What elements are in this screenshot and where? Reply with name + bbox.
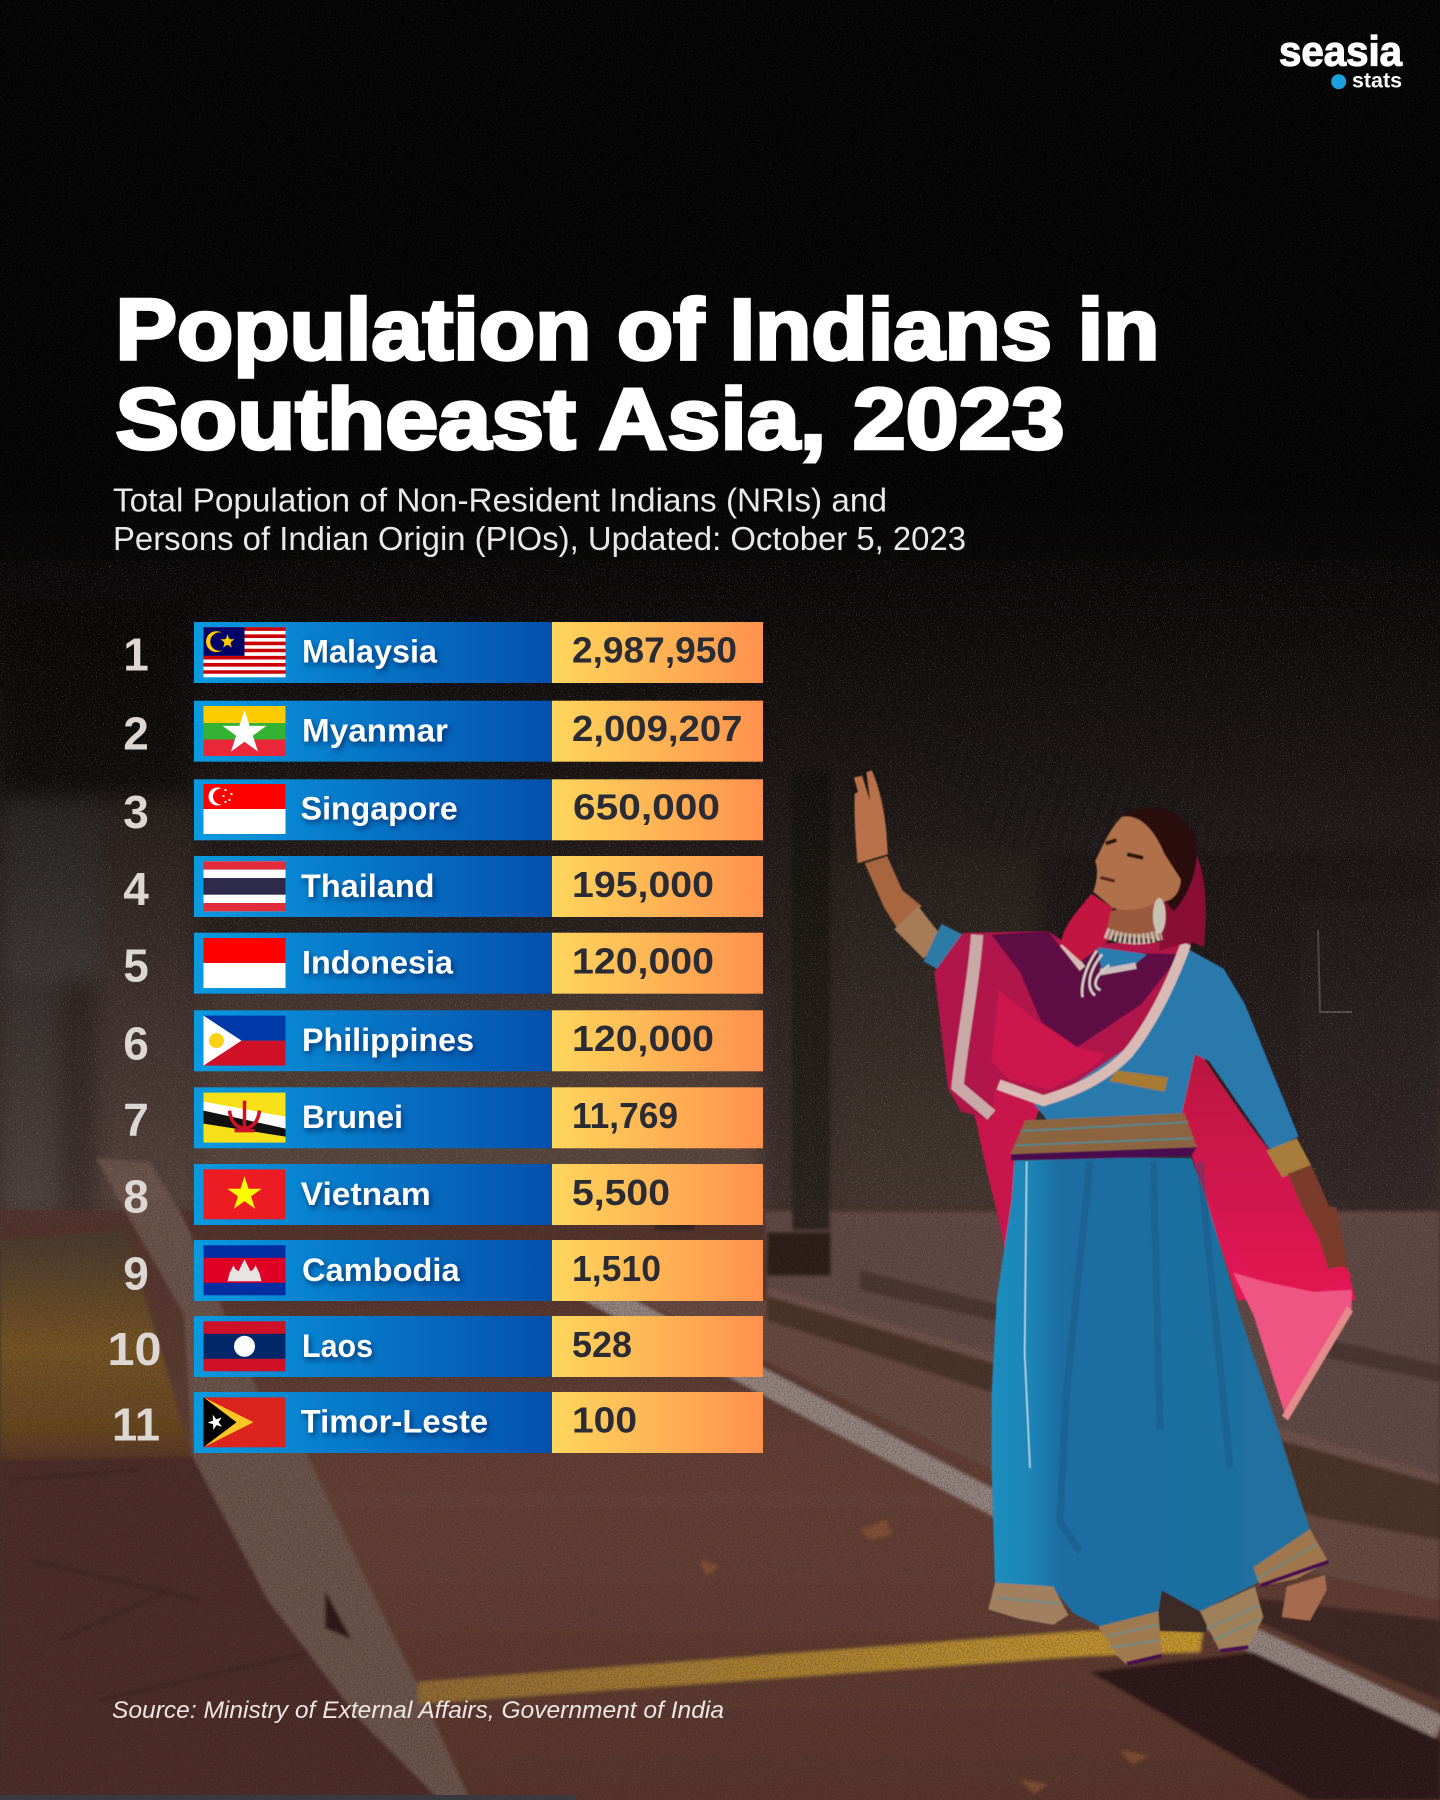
row 3: Singapore xyxy=(123,779,763,840)
row 5: Indonesia: 120,000 xyxy=(572,941,714,982)
row 9: Cambodia: 9 xyxy=(123,1247,149,1299)
row 7: Brunei: Brunei xyxy=(302,1099,403,1135)
row 4: Thailand xyxy=(123,856,763,917)
leaves xyxy=(700,1400,1150,1794)
row 8: Vietnam xyxy=(123,1164,763,1225)
row 8: Vietnam: 8 xyxy=(123,1171,149,1223)
row 1: Malaysia: 2,987,950 xyxy=(572,630,737,670)
row 5: Indonesia: 5 xyxy=(123,940,149,992)
subtitle: Persons of Indian Origin (PIOs), Updated: October 5, 2023 xyxy=(113,520,966,557)
row 7: Brunei xyxy=(123,1087,763,1148)
row 1: Malaysia: 1 xyxy=(123,629,149,681)
row 5: Indonesia xyxy=(123,933,763,994)
row 9: Cambodia xyxy=(123,1240,763,1301)
row 10: Laos: 10 xyxy=(108,1323,162,1375)
row 6: Philippines: 6 xyxy=(123,1017,149,1069)
flag: Indonesia xyxy=(204,938,286,988)
flag: Brunei xyxy=(204,1093,286,1143)
row 8: Vietnam: 5,500 xyxy=(572,1172,670,1213)
row 10: Laos: Laos xyxy=(302,1328,373,1364)
row 10: Laos xyxy=(108,1316,763,1377)
row 1: Malaysia: Malaysia xyxy=(302,634,437,670)
row 6: Philippines: 120,000 xyxy=(572,1018,714,1059)
row 9: Cambodia: Cambodia xyxy=(302,1252,460,1288)
upper body of dancer xyxy=(854,770,1347,1269)
row 3: Singapore: 650,000 xyxy=(573,786,720,827)
title: Southeast Asia, 2023 xyxy=(116,372,1064,468)
yellow road line xyxy=(418,1631,1203,1704)
subtitle xyxy=(113,482,966,557)
shadow xyxy=(1090,1652,1440,1800)
concrete strip xyxy=(96,1158,470,1800)
logo: seasia stats: seasia xyxy=(1279,28,1403,74)
roof xyxy=(890,722,1290,850)
row 2: Myanmar: 2,009,207 xyxy=(572,708,742,749)
row 5: Indonesia: Indonesia xyxy=(302,945,453,981)
row 9: Cambodia: 1,510 xyxy=(572,1248,661,1289)
row 3: Singapore: 3 xyxy=(123,786,149,838)
flag: Vietnam xyxy=(204,1169,286,1219)
row 3: Singapore: Singapore xyxy=(301,790,458,826)
subtitle: Total Population of Non-Resident Indians (NRIs) and xyxy=(113,482,887,518)
row 7: Brunei: 7 xyxy=(123,1094,149,1146)
flag: Thailand xyxy=(204,861,286,911)
flag: Singapore xyxy=(204,784,286,834)
row 4: Thailand: 195,000 xyxy=(572,864,714,905)
row 11: Timor-Leste: 100 xyxy=(572,1400,637,1441)
row 1: Malaysia xyxy=(123,622,763,683)
logo dot xyxy=(1331,74,1346,89)
flag: Myanmar xyxy=(204,706,286,756)
row 7: Brunei: 11,769 xyxy=(572,1095,678,1136)
flag: Cambodia xyxy=(204,1245,286,1295)
post xyxy=(792,770,830,1230)
row 11: Timor-Leste: Timor-Leste xyxy=(301,1404,488,1440)
row 2: Myanmar: 2 xyxy=(123,707,149,759)
lower left ground xyxy=(0,1457,440,1800)
skirt and lower veil of dancer xyxy=(988,1158,1352,1665)
flag: Laos xyxy=(204,1321,286,1371)
flag: Malaysia xyxy=(204,627,286,677)
row 2: Myanmar xyxy=(123,701,763,762)
left amber gutter xyxy=(0,1230,193,1480)
logo: seasia stats: stats xyxy=(1352,70,1402,93)
row 10: Laos: 528 xyxy=(572,1324,632,1365)
flag: Timor-Leste xyxy=(204,1397,286,1447)
row 4: Thailand: Thailand xyxy=(301,868,434,904)
title: Population of Indians in xyxy=(116,282,1160,378)
ranking table xyxy=(108,622,763,1453)
dancer figure xyxy=(854,770,1356,1665)
row 6: Philippines xyxy=(123,1010,763,1071)
row 2: Myanmar: Myanmar xyxy=(302,712,448,748)
back veil of dancer xyxy=(934,954,1356,1300)
row 6: Philippines: Philippines xyxy=(302,1022,474,1058)
curb xyxy=(767,1287,1440,1540)
source note: Source: Ministry of External Affairs, Government of India xyxy=(112,1697,724,1724)
title xyxy=(116,282,1160,468)
row 8: Vietnam: Vietnam xyxy=(301,1176,431,1212)
white road line xyxy=(590,1290,1440,1728)
gutter strip xyxy=(640,1300,1440,1600)
flag: Philippines xyxy=(204,1016,286,1066)
faint window outline xyxy=(1318,930,1352,1012)
row 11: Timor-Leste: 11 xyxy=(112,1399,160,1451)
sidewalk xyxy=(765,1212,1440,1475)
row 11: Timor-Leste xyxy=(112,1392,763,1453)
row 4: Thailand: 4 xyxy=(123,863,149,915)
